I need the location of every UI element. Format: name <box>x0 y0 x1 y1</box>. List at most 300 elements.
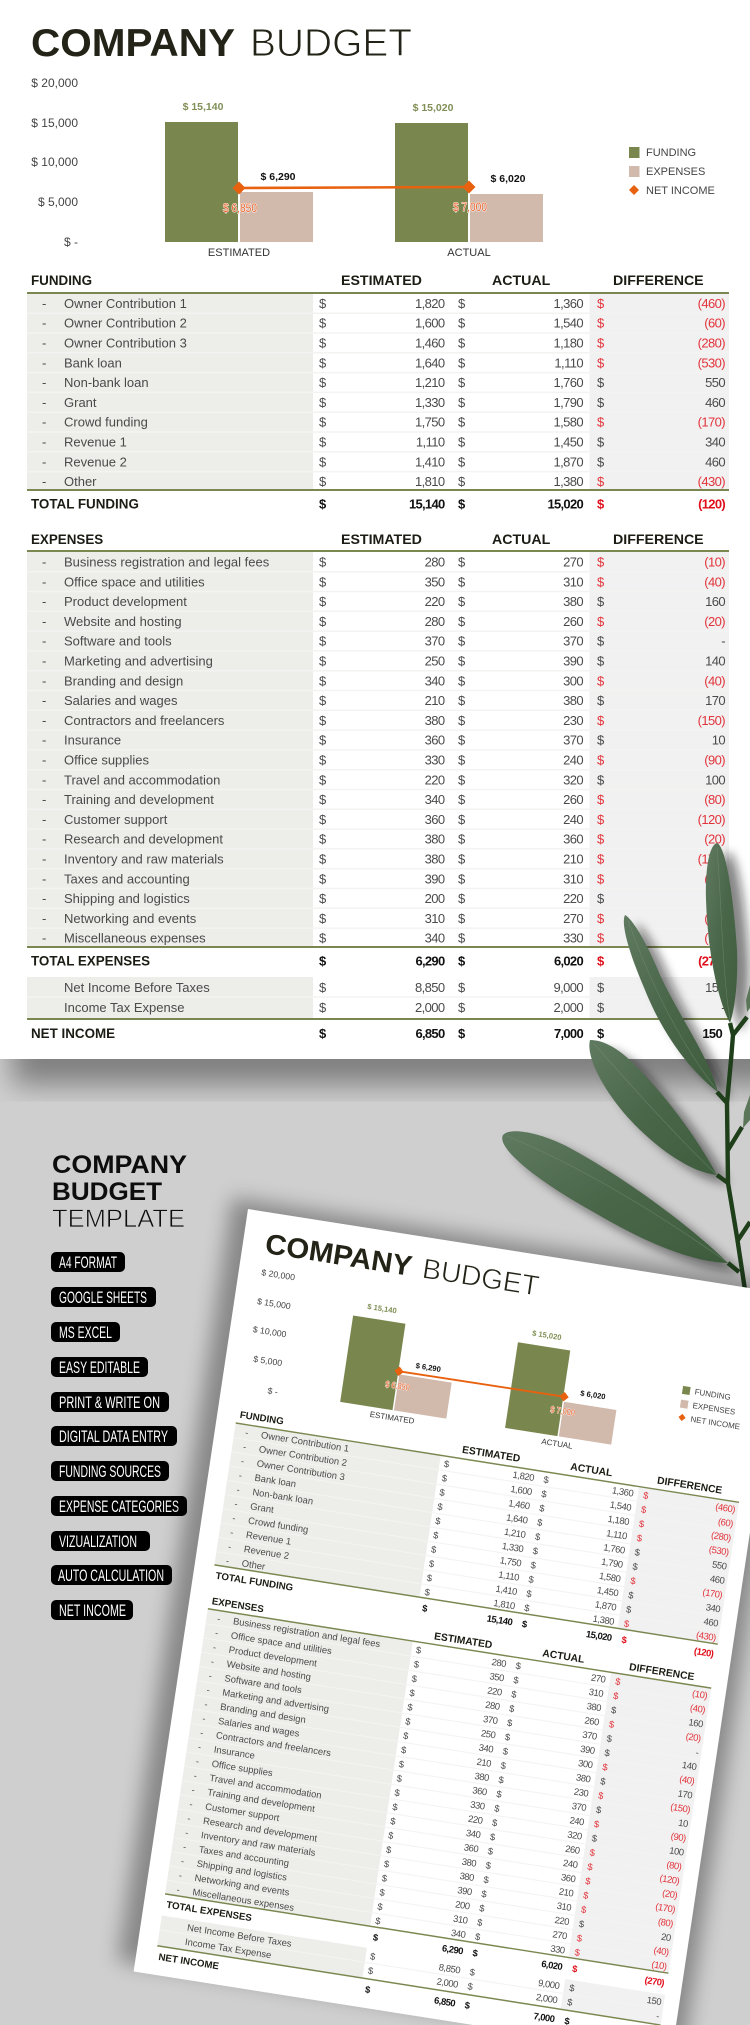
preview funding table: $ <box>532 1546 540 1558</box>
expense rows: 340 <box>425 792 445 807</box>
preview funding table: Crowd funding <box>247 1516 309 1536</box>
preview expenses table: Business registration and legal fees <box>232 1616 381 1650</box>
expense rows: $ <box>319 772 327 787</box>
preview expenses table: $ <box>404 1716 412 1728</box>
preview funding table: 1,600 <box>510 1484 533 1498</box>
expense rows: $ <box>597 931 605 946</box>
funding rows: (460) <box>698 296 725 311</box>
preview expenses table: $ <box>374 1916 382 1928</box>
funding rows <box>42 296 725 489</box>
y axis labels: $ 20,000 <box>31 76 78 90</box>
leaf: bottom <box>502 1131 728 1263</box>
preview funding table: Revenue 2 <box>243 1544 290 1562</box>
expense rows: 220 <box>563 891 583 906</box>
expense rows: 370 <box>563 733 583 748</box>
expense rows: Networking and events <box>64 911 197 926</box>
funding rows: 1,750 <box>415 415 445 430</box>
expense rows: 160 <box>705 594 725 609</box>
preview expenses table: (20) <box>661 1888 678 1901</box>
preview expenses table: Taxes and accounting <box>198 1844 290 1869</box>
preview funding table: $ <box>627 1590 635 1602</box>
funding rows: $ <box>458 375 466 390</box>
expense rows: 280 <box>425 614 445 629</box>
preview expenses table: $ <box>606 1733 613 1745</box>
expense rows: $ <box>597 871 605 886</box>
preview expenses table: 200 <box>454 1899 471 1912</box>
funding rows: Owner Contribution 2 <box>64 316 187 331</box>
funding rows: - <box>42 395 46 410</box>
preview funding table: - <box>229 1527 234 1539</box>
preview expenses table: 270 <box>590 1673 606 1686</box>
preview expenses table: $ <box>496 1789 503 1801</box>
legend: EXPENSES <box>646 166 705 178</box>
expense rows: 330 <box>563 931 583 946</box>
preview expenses table: $ <box>513 1675 520 1687</box>
preview expenses table: 380 <box>461 1857 477 1870</box>
preview expenses table: $ <box>400 1745 408 1757</box>
preview expenses table: $ <box>614 1676 622 1688</box>
expense rows: $ <box>319 614 327 629</box>
preview funding table: $ <box>428 1559 436 1570</box>
preview expenses table: - <box>199 1728 204 1739</box>
table: expenses <box>27 532 729 968</box>
net income line <box>232 180 476 194</box>
preview funding table: $ <box>526 1589 533 1600</box>
preview funding table: $ <box>543 1475 550 1486</box>
expense rows: - <box>42 614 46 629</box>
preview funding table: Owner Contribution 1 <box>260 1430 350 1455</box>
funding rows: $ <box>458 434 466 450</box>
total expenses: 6,020 <box>554 954 583 968</box>
expense rows: $ <box>319 554 327 570</box>
expense rows: - <box>42 654 46 668</box>
preview funding table: - <box>232 1513 236 1524</box>
expense rows: 320 <box>563 772 583 787</box>
expense rows: $ <box>458 713 466 728</box>
funding rows: $ <box>319 395 327 410</box>
expenses header: DIFFERENCE <box>613 532 704 548</box>
preview expenses table: $ <box>506 1718 514 1730</box>
preview net income summary <box>155 1918 665 2025</box>
preview expenses table: $ <box>576 1933 583 1945</box>
expense rows: (20) <box>704 614 725 629</box>
preview funding table: $ <box>634 1547 641 1559</box>
expense rows: Inventory and raw materials <box>64 852 224 866</box>
expense rows: $ <box>597 812 605 827</box>
preview expenses table: $ <box>498 1775 505 1787</box>
pill: net income: NET INCOME <box>59 1601 126 1620</box>
preview expenses table: $ <box>591 1833 598 1845</box>
preview chart: $ 6,290 <box>415 1361 441 1374</box>
preview chart: EXPENSES <box>692 1401 736 1417</box>
funding rows: (280) <box>698 336 725 350</box>
expense rows: 220 <box>425 594 445 609</box>
preview funding table: 1,640 <box>505 1512 528 1527</box>
funding rows: $ <box>597 296 605 311</box>
total funding: $ <box>319 496 327 512</box>
pill: google sheets <box>51 1287 156 1307</box>
preview funding table: (430) <box>695 1630 717 1644</box>
expense rows: Travel and accommodation <box>64 772 220 787</box>
preview funding table: (460) <box>715 1502 736 1516</box>
expense rows: $ <box>319 574 327 589</box>
funding rows: $ <box>458 355 466 370</box>
preview expenses table: $ <box>608 1719 616 1731</box>
preview funding table: Other <box>241 1558 266 1573</box>
preview expenses table: 210 <box>476 1757 492 1770</box>
leaf: right edge pieces <box>743 985 750 1128</box>
preview expenses table: $ <box>402 1731 410 1742</box>
preview expenses table: $ <box>485 1860 492 1872</box>
preview expenses table: Miscellaneous expenses <box>192 1887 295 1914</box>
total funding: 15,020 <box>547 496 583 512</box>
expense rows: 350 <box>425 574 445 589</box>
preview expenses table: 340 <box>478 1742 494 1756</box>
income tax expense: Income Tax Expense <box>64 1000 184 1015</box>
funding rows: $ <box>597 355 605 370</box>
expense rows: $ <box>458 792 466 807</box>
preview expenses table: $ <box>394 1788 401 1799</box>
preview funding table: ESTIMATED <box>461 1445 521 1465</box>
funding rows: $ <box>597 434 605 450</box>
total funding: TOTAL FUNDING <box>31 496 139 512</box>
funding header: ESTIMATED <box>341 273 422 289</box>
preview net income summary: 2,000 <box>436 1976 459 1991</box>
preview expenses table: 280 <box>491 1657 507 1670</box>
funding rows: Other <box>64 474 97 489</box>
preview funding table: 1,330 <box>501 1541 524 1555</box>
preview expenses table: $ <box>483 1875 490 1886</box>
preview expenses table: $ <box>491 1818 499 1829</box>
preview funding table: 1,820 <box>512 1470 535 1484</box>
expense rows: 390 <box>425 871 445 886</box>
funding rows: 340 <box>705 434 725 450</box>
preview expenses table: Website and hosting <box>226 1659 312 1683</box>
preview expenses table: 250 <box>480 1728 496 1741</box>
leaf midribs <box>507 848 730 1262</box>
preview expenses table: 390 <box>457 1885 473 1898</box>
preview funding table: 1,110 <box>498 1570 520 1584</box>
funding rows: $ <box>319 454 327 469</box>
preview expenses table: - <box>695 1747 700 1759</box>
preview chart: $ 15,140 <box>367 1302 397 1315</box>
preview expenses table: (170) <box>655 1902 676 1916</box>
preview expenses table: - <box>189 1799 193 1810</box>
expense rows: Marketing and advertising <box>64 654 213 668</box>
preview expenses table: - <box>184 1828 189 1839</box>
expense rows: 380 <box>425 832 445 847</box>
preview expenses table: 300 <box>577 1758 593 1771</box>
y axis labels: $ 15,000 <box>31 116 78 130</box>
expense rows: $ <box>319 634 327 649</box>
expense rows: 240 <box>563 812 583 827</box>
preview expenses table: 260 <box>564 1844 581 1857</box>
preview expenses table: $ <box>604 1748 611 1760</box>
preview funding table: 15,140 <box>486 1613 513 1628</box>
preview expenses table: $ <box>478 1903 486 1915</box>
funding rows: 1,410 <box>415 454 445 469</box>
funding rows: Crowd funding <box>64 415 148 430</box>
funding rows: $ <box>597 415 605 430</box>
funding rows: 1,380 <box>553 474 583 489</box>
expense rows: Office supplies <box>64 752 150 768</box>
legend <box>629 147 715 197</box>
funding rows: - <box>42 296 46 311</box>
funding rows: 1,600 <box>415 316 445 331</box>
preview expenses table: (10) <box>651 1959 667 1973</box>
preview expenses table: - <box>191 1785 196 1796</box>
preview expenses table: ACTUAL <box>542 1648 585 1666</box>
preview funding table: 1,580 <box>598 1571 621 1585</box>
preview funding table: FUNDING <box>239 1410 284 1428</box>
preview expenses table: (80) <box>657 1917 674 1930</box>
preview funding table: 1,360 <box>611 1485 634 1500</box>
preview expenses table: Software and tools <box>224 1673 303 1696</box>
preview expenses table: 370 <box>582 1730 598 1743</box>
preview funding table: 1,460 <box>508 1498 531 1512</box>
preview funding table: Revenue 1 <box>245 1530 292 1548</box>
income tax expense: $ <box>458 1000 466 1015</box>
expense rows: 270 <box>563 554 583 570</box>
preview expenses table: Marketing and advertising <box>222 1687 330 1715</box>
preview funding table: $ <box>638 1519 646 1531</box>
funding rows: (530) <box>698 355 725 370</box>
funding rows: $ <box>458 316 466 331</box>
funding rows: $ <box>458 474 466 489</box>
expense rows: 140 <box>705 654 725 668</box>
expense rows: $ <box>458 931 466 946</box>
expense rows: $ <box>319 792 327 807</box>
preview expenses table: $ <box>413 1659 421 1671</box>
preview expenses table: (90) <box>670 1831 687 1844</box>
preview expenses table: Office space and utilities <box>230 1630 333 1657</box>
preview expenses table: 100 <box>668 1845 684 1859</box>
net income before taxes: Net Income Before Taxes <box>64 980 210 995</box>
expense rows: Business registration and legal fees <box>64 554 270 570</box>
preview funding table: $ <box>439 1487 446 1499</box>
pill: funding sources: FUNDING SOURCES <box>59 1462 161 1481</box>
pill: auto calculation <box>51 1565 172 1585</box>
preview expenses table: 240 <box>562 1858 578 1871</box>
preview expenses table: - <box>176 1885 181 1896</box>
bars <box>165 122 543 242</box>
total expenses: $ <box>597 954 605 968</box>
preview expenses table: $ <box>372 1932 380 1944</box>
pill: a4 format: A4 FORMAT <box>59 1253 117 1272</box>
expense rows: $ <box>458 812 466 827</box>
stem <box>717 1017 750 1290</box>
preview expenses table: $ <box>597 1790 605 1802</box>
preview funding table: $ <box>530 1560 537 1572</box>
preview expenses table: $ <box>574 1947 581 1959</box>
funding rows: 1,360 <box>553 296 583 311</box>
preview funding table: 1,380 <box>592 1614 615 1628</box>
net income before taxes: 150 <box>705 980 725 995</box>
expense rows <box>42 554 725 946</box>
expense rows: Miscellaneous expenses <box>64 931 206 946</box>
plant shadow <box>514 852 749 1272</box>
expense rows: Contractors and freelancers <box>64 713 225 728</box>
funding rows: 1,810 <box>415 474 445 489</box>
funding rows: $ <box>319 415 327 430</box>
expense rows: 100 <box>705 772 725 787</box>
preview expenses table: Research and development <box>202 1816 318 1845</box>
preview expenses table: Networking and events <box>194 1873 290 1899</box>
preview net income summary: $ <box>469 1967 476 1979</box>
funding rows: Grant <box>64 395 97 410</box>
expense rows: $ <box>319 673 327 688</box>
expense rows: 380 <box>425 852 445 866</box>
preview funding table: $ <box>642 1490 650 1502</box>
preview expenses table: - <box>197 1742 202 1753</box>
expense rows: - <box>42 871 46 886</box>
net income total: $ <box>458 1026 466 1041</box>
funding rows: Revenue 1 <box>64 434 127 450</box>
preview funding table: - <box>244 1428 249 1439</box>
total expenses: (270) <box>698 954 725 968</box>
income tax expense: 2,000 <box>553 1000 583 1015</box>
preview expenses table <box>163 1596 713 1990</box>
expense rows: 210 <box>563 852 583 866</box>
expense rows: 390 <box>563 654 583 668</box>
funding rows: 1,110 <box>554 355 583 370</box>
preview expenses table: $ <box>472 1948 479 1960</box>
preview net income summary: 150 <box>646 1995 662 2008</box>
expense rows: (150) <box>698 713 725 728</box>
total expenses: TOTAL EXPENSES <box>31 954 150 968</box>
expense rows: $ <box>458 594 466 609</box>
expense rows: 170 <box>705 693 725 708</box>
expense rows: $ <box>597 614 605 629</box>
net income total: 6,850 <box>415 1026 445 1041</box>
preview expenses table: $ <box>398 1759 406 1771</box>
net income before taxes: $ <box>597 980 605 995</box>
preview expenses table: $ <box>481 1889 488 1901</box>
preview expenses table: $ <box>502 1746 509 1758</box>
preview expenses table: 310 <box>452 1914 468 1927</box>
expense rows: 270 <box>563 911 583 926</box>
preview net income summary: $ <box>364 1984 372 1996</box>
preview funding table: ACTUAL <box>570 1462 613 1479</box>
expense rows: $ <box>597 594 605 609</box>
preview funding table: $ <box>625 1604 633 1616</box>
expense rows: 360 <box>563 832 583 847</box>
expense rows: (170) <box>698 852 725 866</box>
pill: vizualization: VIZUALIZATION <box>59 1532 137 1551</box>
preview expenses table: - <box>208 1671 213 1682</box>
preview expenses table: - <box>206 1685 211 1696</box>
funding rows: Bank loan <box>64 355 122 370</box>
expense rows: $ <box>458 673 466 688</box>
expense rows: $ <box>458 574 466 589</box>
funding rows: Owner Contribution 1 <box>64 296 187 311</box>
preview funding table: $ <box>430 1544 438 1556</box>
funding rows: 460 <box>705 454 725 469</box>
preview chart <box>242 1267 750 1476</box>
preview expenses table: 260 <box>584 1715 600 1729</box>
pill: expense categories: EXPENSE CATEGORIES <box>59 1497 179 1516</box>
funding rows: $ <box>458 454 466 469</box>
expense rows: $ <box>319 891 327 906</box>
total funding: $ <box>458 496 466 512</box>
preview expenses table: $ <box>392 1802 399 1814</box>
preview expenses table: EXPENSES <box>211 1596 265 1615</box>
expense rows: $ <box>458 654 466 668</box>
expense rows: - <box>42 713 46 728</box>
expenses header: ACTUAL <box>492 532 551 548</box>
expense rows: - <box>42 693 46 708</box>
preview funding table: 1,750 <box>499 1555 522 1569</box>
preview expenses table: 330 <box>549 1943 566 1957</box>
preview expenses table: Product development <box>228 1645 318 1670</box>
preview expenses table: $ <box>602 1762 609 1774</box>
funding rows: $ <box>597 316 605 331</box>
funding rows: $ <box>597 454 605 469</box>
expense rows: - <box>42 594 46 609</box>
expense rows: 360 <box>425 812 445 827</box>
funding rows: - <box>42 474 46 489</box>
preview expenses table: $ <box>379 1887 386 1899</box>
expense rows: 240 <box>563 752 583 768</box>
expense rows: Research and development <box>64 832 223 847</box>
preview expenses table: (10) <box>691 1689 708 1702</box>
preview funding table: 1,790 <box>600 1557 623 1571</box>
pill: auto calculation: AUTO CALCULATION <box>58 1566 164 1585</box>
expense rows: (20) <box>704 832 725 847</box>
expense rows: 340 <box>425 931 445 946</box>
shadow: top sheet <box>12 1030 750 1085</box>
expense rows: 200 <box>425 891 445 906</box>
funding rows: $ <box>458 415 466 430</box>
expense rows: - <box>42 772 46 787</box>
preview funding table: 1,450 <box>596 1585 619 1599</box>
preview expenses table: (270) <box>644 1975 665 1989</box>
preview net income summary: $ <box>566 1997 574 2009</box>
funding rows: - <box>42 415 46 430</box>
pill: net income <box>51 1600 133 1620</box>
preview funding table: $ <box>621 1635 628 1646</box>
preview funding table: Bank loan <box>254 1473 297 1490</box>
expense rows: - <box>42 634 46 649</box>
preview expenses table: Contractors and freelancers <box>215 1730 332 1759</box>
funding rows: - <box>42 336 46 350</box>
data labels: $ 6,020 <box>490 173 526 185</box>
preview title: COMPANY <box>263 1228 414 1283</box>
preview funding table: $ <box>441 1473 448 1485</box>
preview funding table: - <box>234 1499 238 1510</box>
expense rows: $ <box>319 852 327 866</box>
pill: print and write on <box>51 1392 169 1412</box>
legend: FUNDING <box>646 147 696 159</box>
pill: vizualization <box>51 1531 150 1551</box>
expense rows: $ <box>597 693 605 708</box>
expense rows: $ <box>597 554 605 570</box>
preview expenses table: - <box>180 1856 185 1867</box>
preview funding table: 1,410 <box>495 1584 518 1598</box>
preview expenses table: 330 <box>469 1799 485 1813</box>
expense rows: 370 <box>563 634 583 649</box>
preview expenses table: (40) <box>679 1774 695 1787</box>
preview expenses table: 340 <box>450 1928 466 1941</box>
preview expenses table: - <box>187 1813 191 1825</box>
side heading <box>52 1151 187 1233</box>
preview expenses table: $ <box>504 1732 512 1744</box>
preview expenses table: $ <box>508 1703 516 1715</box>
preview expenses table: (80) <box>666 1860 682 1873</box>
preview net income summary: $ <box>467 1981 474 1993</box>
preview expenses table: Branding and design <box>219 1702 306 1726</box>
preview funding table: $ <box>534 1532 542 1543</box>
